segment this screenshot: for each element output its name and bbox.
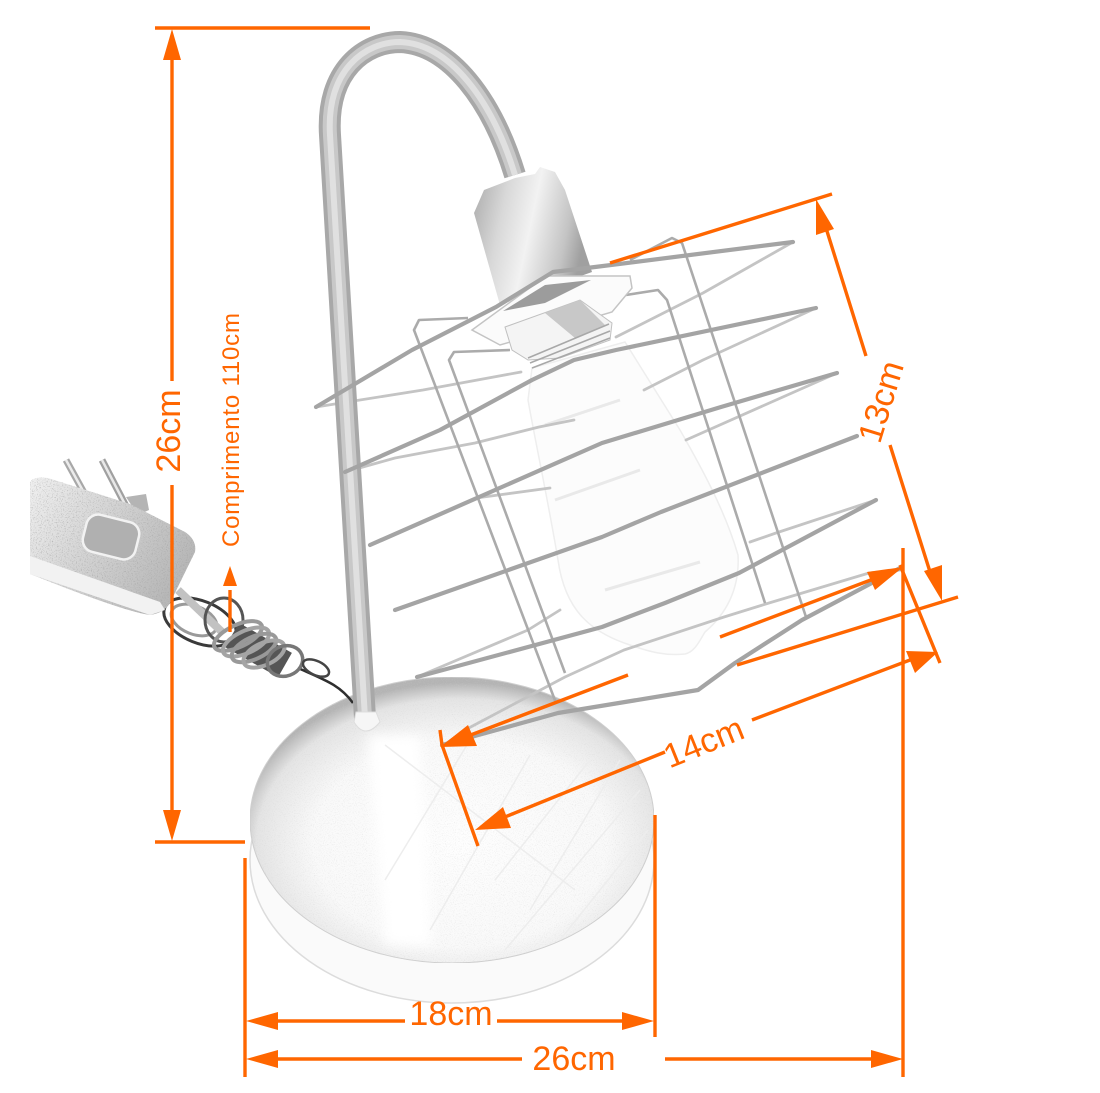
power cord <box>298 668 353 703</box>
shade width dimension: 14cm: 14cm <box>658 710 750 776</box>
cage back wires <box>316 242 900 745</box>
plug body with switch <box>30 478 195 615</box>
arm <box>330 42 515 731</box>
bulb <box>528 342 738 655</box>
socket <box>474 167 592 305</box>
base width dimension: 18cm: 18cm <box>409 995 493 1033</box>
base width dimension: 18cm <box>245 815 655 1077</box>
plug prongs <box>66 460 149 515</box>
socket flange and threaded nut <box>472 276 632 368</box>
shade width dimension: 14cm <box>440 565 958 846</box>
cord coil <box>157 588 332 681</box>
cage front rings <box>316 242 902 745</box>
lamp base <box>250 677 654 1003</box>
cord length dimension: Comprimento 110cm: Comprimento 110cm <box>218 313 245 547</box>
overall width dimension: 26cm <box>246 548 903 1078</box>
height dimension: 26cm: 26cm <box>150 389 188 473</box>
height dimension: 26cm <box>150 28 370 842</box>
lamp illustration <box>30 42 902 1003</box>
cage frames <box>414 238 806 703</box>
overall width dimension: 26cm: 26cm <box>532 1040 616 1078</box>
shade height dimension: 13cm: 13cm <box>851 356 912 447</box>
shade height dimension: 13cm <box>610 194 942 601</box>
